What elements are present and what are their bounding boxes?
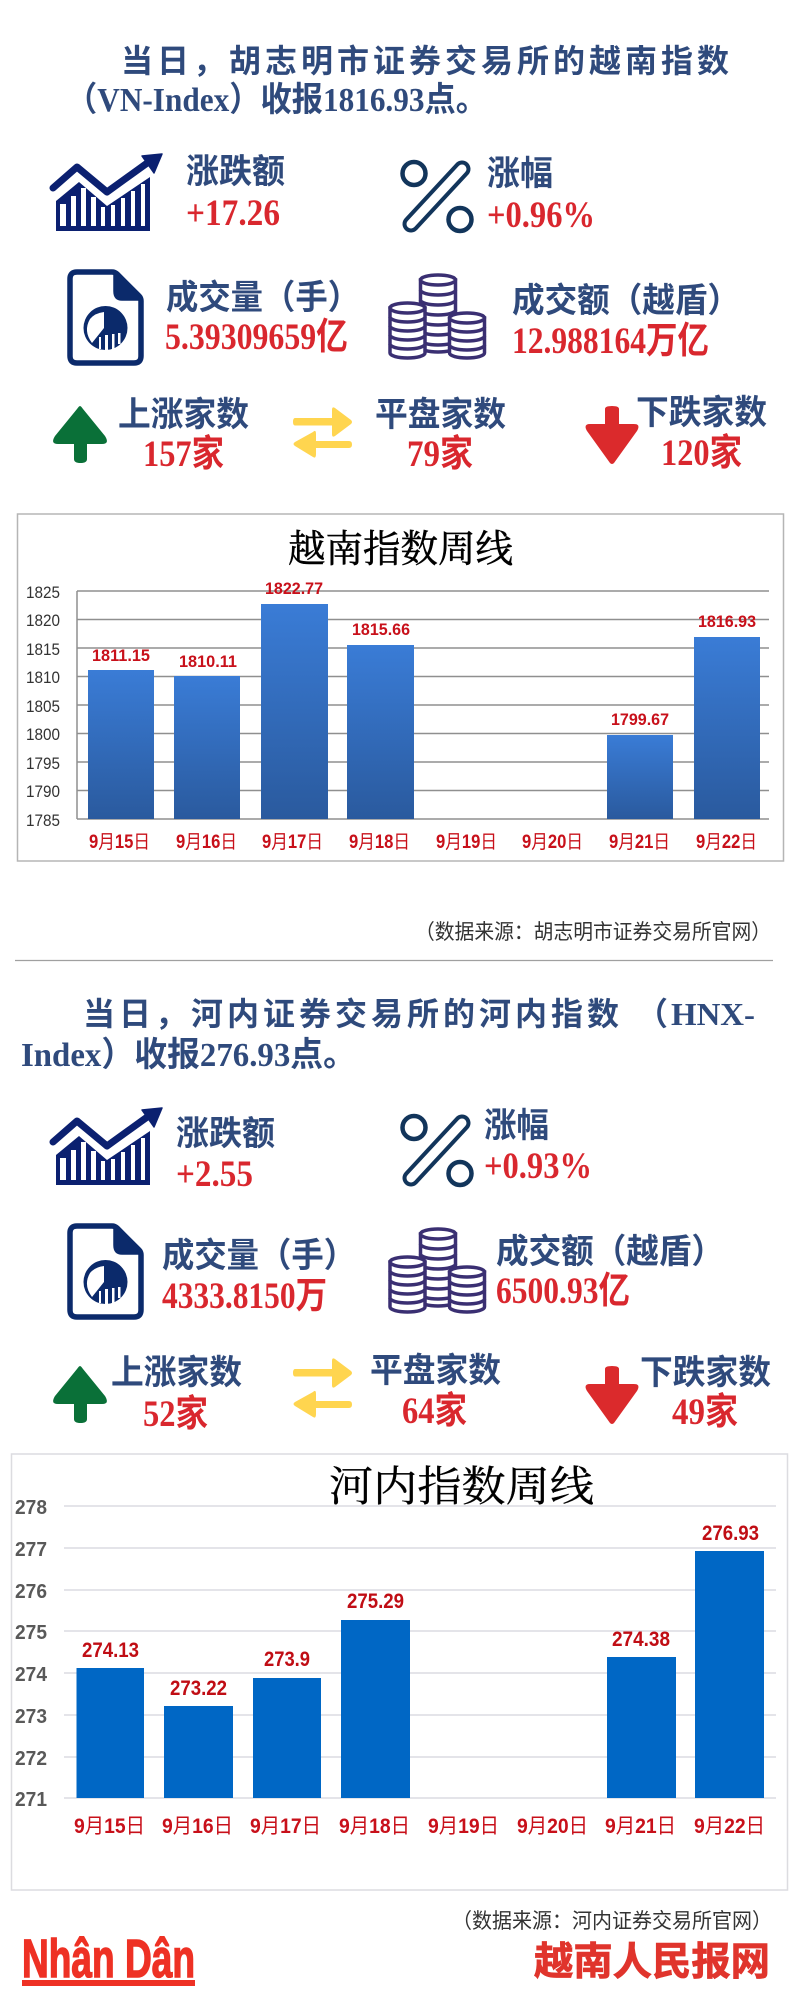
x axis labels: 9月17日 [262,832,323,853]
y axis labels: 1800 [26,725,60,744]
icon: coin stacks [390,1229,484,1312]
x axis labels: 9月19日 [436,832,497,853]
stat: unchanged stocks [370,1352,501,1432]
stat: change percent: +0.96% [487,195,595,236]
stat: trading volume: 5.39309659亿 [165,316,348,358]
chart title: 越南指数周线 [288,529,513,571]
y axis labels: 274 [15,1664,48,1686]
icon: rising line and bars [53,154,162,231]
icon: green up arrow [53,1366,107,1423]
stat: change amount: +2.55 [176,1154,253,1195]
title: VN-Index headline [66,43,729,119]
stat: trading value: 成交额（越盾） [512,282,740,320]
x axis labels [74,1815,765,1838]
bars [76,1551,764,1798]
stat: declining stocks [636,394,767,474]
stat: change percent: +0.93% [484,1146,592,1187]
icon: coin stacks [390,275,484,358]
title: VN-Index headline: 当日，胡志明市证券交易所的越南指数 [121,43,729,79]
icon: percent sign [402,1116,472,1185]
x axis labels: 9月15日 [74,1815,145,1838]
x axis labels: 9月17日 [250,1815,321,1838]
x axis labels: 9月19日 [428,1815,499,1838]
source note: Ho Chi Minh exchange: （数据来源：胡志明市证券交易所官网） [415,921,771,944]
stat: advancing stocks [118,396,249,475]
stat: declining stocks: 120家 [661,432,742,474]
stat: change amount [186,153,285,234]
data labels: 1811.15 [92,646,150,665]
x axis labels [89,832,757,853]
stat: declining stocks [640,1354,771,1433]
stat: trading value: 成交额（越盾） [496,1233,724,1271]
stat: declining stocks: 下跌家数 [640,1354,771,1392]
stat: trading volume: 4333.8150万 [162,1276,327,1317]
data labels: 1822.77 [265,579,323,598]
stat: unchanged stocks: 64家 [402,1390,467,1432]
x axis labels: 9月16日 [162,1815,233,1838]
x axis labels: 9月21日 [609,832,670,853]
stat: trading value [496,1233,724,1312]
y axis labels: 275 [15,1622,47,1644]
stat: unchanged stocks: 平盘家数 [375,396,506,434]
data labels [92,579,756,729]
stat: change amount: +17.26 [186,193,280,234]
logo: Nhan Dan: Nhân Dân [22,1929,195,1989]
title: HNX-Index headline: HNX- [671,996,755,1032]
stat: trading value: 6500.93亿 [496,1270,630,1312]
icon: red down arrow [586,406,638,464]
icon: red down arrow [586,1366,638,1424]
stat: trading volume [165,279,360,358]
data labels: 274.38 [612,1628,670,1651]
stat: trading volume: 成交量（手） [162,1237,356,1275]
stat: declining stocks: 49家 [672,1391,738,1433]
title: HNX-Index headline: 当日，河内证券交易所的河内指数 [83,996,623,1032]
y axis labels: 271 [15,1789,47,1811]
y axis labels: 273 [15,1706,47,1728]
panel: HNX-Index weekly bar chart [12,1454,788,1890]
y axis labels: 276 [15,1581,47,1603]
title: HNX-Index headline: （ [636,996,668,1032]
source note: Hanoi exchange: （数据来源：河内证券交易所官网） [452,1910,772,1933]
stat: unchanged stocks [375,396,506,475]
data labels: 1816.93 [698,612,756,631]
title: VN-Index headline: （VN-Index）收报1816.93点。 [66,81,487,119]
stat: unchanged stocks: 平盘家数 [370,1352,501,1390]
y axis labels: 272 [15,1748,47,1770]
stat: unchanged stocks: 79家 [407,433,473,475]
y axis labels: 1785 [26,811,60,830]
icon: document with pie chart [70,1226,142,1317]
icon: green up arrow [53,406,107,463]
data labels: 274.13 [82,1639,139,1662]
panel: HNX-Index section [21,996,771,1435]
x axis labels: 9月20日 [522,832,583,853]
icon: percent sign [402,162,472,231]
stat: change percent [487,155,595,236]
y axis labels: 1815 [26,640,60,659]
y axis labels: 278 [15,1497,47,1519]
stat: advancing stocks [111,1354,242,1435]
stat: advancing stocks: 上涨家数 [111,1354,242,1392]
icon: yellow swap arrows [293,407,352,458]
stat: change amount: 涨跌额 [176,1115,275,1153]
x axis labels: 9月15日 [89,832,150,853]
data labels: 275.29 [347,1590,404,1613]
stat: change amount: 涨跌额 [186,153,285,191]
title: HNX-Index headline: Index）收报276.93点。 [21,1036,356,1074]
stat: trading value [512,282,740,362]
stat: change percent: 涨幅 [487,155,553,193]
data labels: 273.9 [264,1648,310,1671]
data labels [82,1522,759,1700]
data labels: 273.22 [170,1677,227,1700]
x axis labels: 9月20日 [517,1815,588,1838]
y axis labels: 1795 [26,754,60,773]
chart title: 河内指数周线 [329,1465,594,1511]
icon: yellow swap arrows [293,1358,352,1418]
stat: trading volume [162,1237,356,1317]
x axis labels: 9月21日 [605,1815,676,1838]
stat: change percent: 涨幅 [484,1107,549,1145]
stat: change percent [484,1107,592,1187]
data labels: 1799.67 [611,710,669,729]
stat: declining stocks: 下跌家数 [636,394,767,432]
stat: advancing stocks: 157家 [143,433,224,475]
icon: rising line and bars [53,1108,162,1185]
panel: VN-Index weekly bar chart [18,514,784,861]
x axis labels: 9月18日 [339,1815,410,1838]
y axis labels: 1810 [26,668,60,687]
x axis labels: 9月18日 [349,832,410,853]
y axis labels: 1805 [26,697,60,716]
title: HNX-Index headline [21,996,755,1074]
y axis labels: 1790 [26,782,60,801]
stat: advancing stocks: 52家 [143,1393,208,1435]
x axis labels: 9月22日 [696,832,757,853]
stat: trading value: 12.988164万亿 [512,320,709,362]
logo: Nhan Dan [22,1929,195,1989]
stat: change amount [176,1115,275,1195]
panel: VN-Index section [53,43,767,475]
brand: Vietnam People's Daily site name: 越南人民报网 [534,1941,770,1984]
y axis labels: 1820 [26,611,60,630]
y axis labels [26,583,60,830]
y axis labels [15,1497,48,1811]
x axis labels: 9月22日 [694,1815,765,1838]
y axis labels: 1825 [26,583,60,602]
stat: advancing stocks: 上涨家数 [118,396,249,434]
data labels: 1810.11 [179,652,237,671]
y axis labels: 277 [15,1539,47,1561]
data labels: 276.93 [702,1522,759,1545]
data labels: 1815.66 [352,620,410,639]
icon: document with pie chart [70,272,142,363]
x axis labels: 9月16日 [176,832,237,853]
stat: trading volume: 成交量（手） [166,279,360,317]
bars [88,604,760,819]
